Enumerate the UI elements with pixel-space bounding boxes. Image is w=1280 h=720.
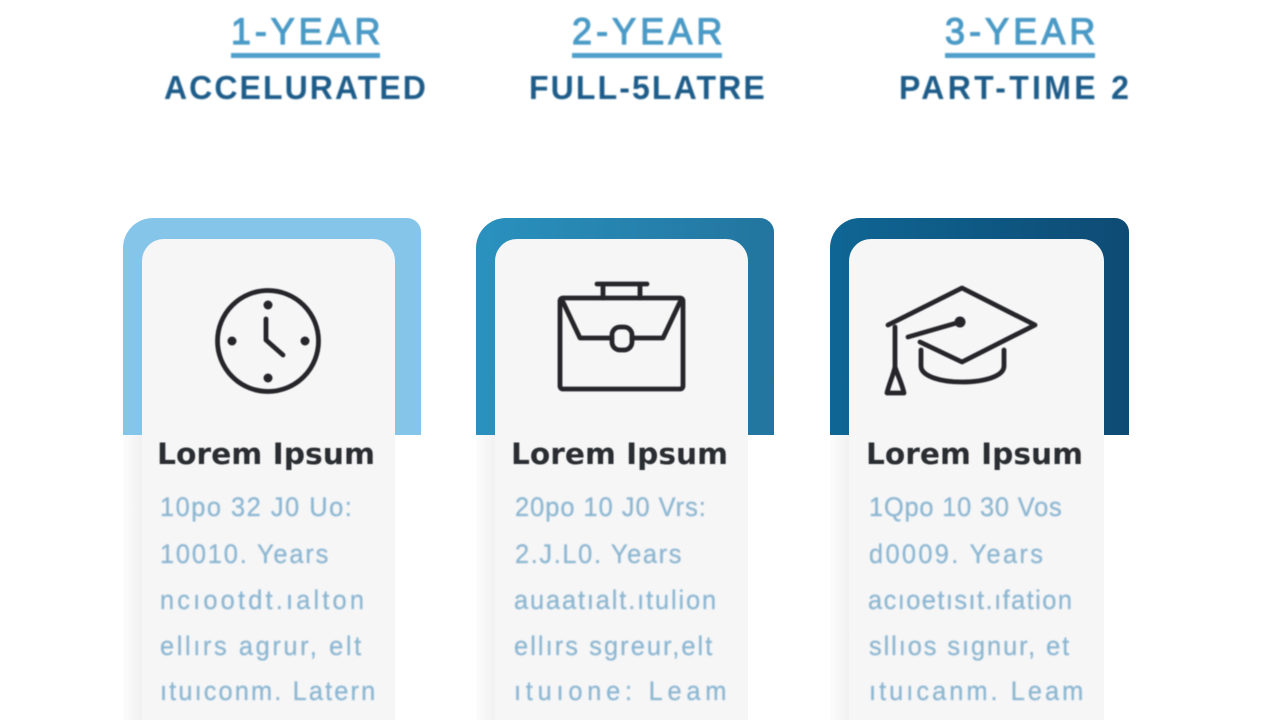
card body text: acıoetısıt.ıfation [868,584,1072,615]
card heading: Lorem Ipsum [866,437,1083,471]
column heading: 2-year full-slatre: FULL-5LATRE [529,70,765,106]
card body text [514,491,726,706]
card heading: Lorem Ipsum [157,437,375,471]
card body text: ellırs agrur, elt [160,630,362,661]
column heading: 1-year accelerated [164,11,426,106]
icon: briefcase [560,284,683,389]
card body text: sllıos sıgnur, et [869,630,1070,661]
card body text: 10010. Years [160,538,328,569]
panel: full-time card [476,218,774,720]
column heading: 2-year full-slatre [529,11,765,106]
card body text: ıtuıone: Leam [514,675,726,706]
column heading: 2-year full-slatre: 2-YEAR [572,11,722,52]
card body text: d0009. Years [869,538,1043,569]
icon: clock [218,290,318,392]
card body text: 2.J.L0. Years [515,538,681,569]
card body text: 1Qpo 10 30 Vos [869,491,1062,522]
column heading: 3-year part-time 2: PART-TIME 2 [899,70,1129,106]
card body text: ıtuıcanm. Leam [869,675,1083,706]
icon: graduation cap [887,288,1035,393]
column heading: 3-year part-time 2 [899,11,1129,106]
column heading: 3-year part-time 2: 3-YEAR [945,11,1095,52]
card body text: auaatıalt.ıtulion [514,584,716,615]
card body text [868,491,1083,706]
card body text: ncıootdt.ıalton [160,584,364,615]
card body text [160,491,375,706]
panel: accelerated card [123,218,421,720]
column heading: 1-year accelerated: ACCELURATED [164,70,426,106]
card body text: ıtuıconm. Latern [160,675,375,706]
card heading: Lorem Ipsum [511,437,728,471]
card body text: ellırs sgreur,elt [514,630,713,661]
card body text: 10po 32 J0 Uo: [160,491,352,522]
card body text: 20po 10 J0 Vrs: [515,491,706,522]
panel: part-time card [830,218,1129,720]
column heading: 1-year accelerated: 1-YEAR [231,11,380,52]
